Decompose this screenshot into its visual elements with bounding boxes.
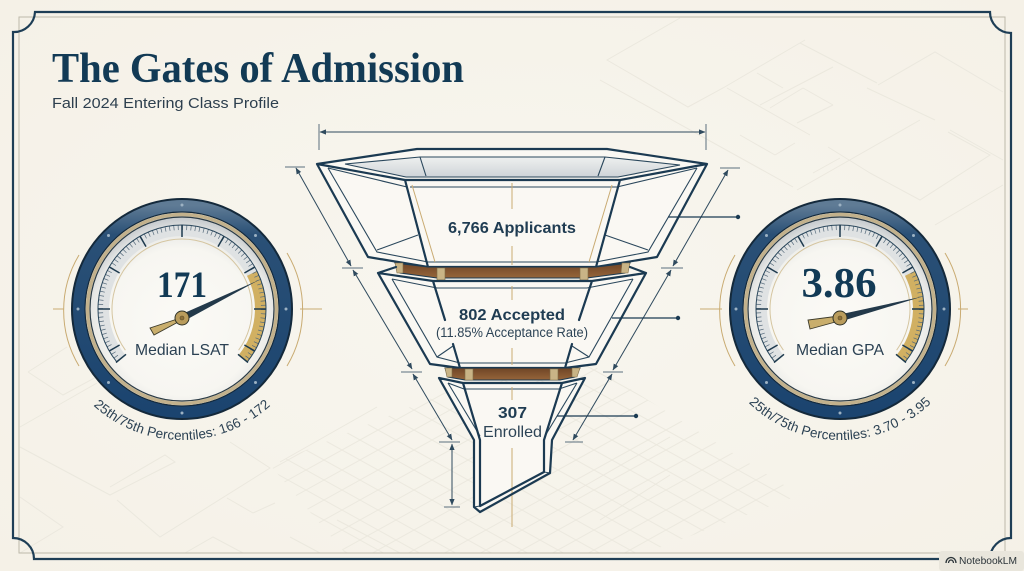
leader lines — [557, 215, 740, 418]
gauge: median GPA — [700, 198, 968, 440]
funnel tier: accepted — [378, 267, 646, 368]
label: enrolled: Enrolled — [483, 424, 542, 441]
percentile label: 25th/75th Percentiles: 166 - 172 — [94, 400, 270, 440]
wooden gate band lower — [445, 368, 580, 380]
funnel tier: enrolled spout — [439, 378, 585, 527]
needle — [808, 297, 922, 329]
value: 3.86: 3.86 — [802, 261, 876, 307]
percentile label: 25th/75th Percentiles: 3.70 - 3.95 — [749, 396, 930, 440]
label: 307: 307 — [498, 405, 527, 422]
needle — [150, 280, 259, 335]
label: accepted: 802 Accepted — [459, 307, 565, 324]
title: The Gates of Admission — [52, 46, 464, 92]
NotebookLM badge — [939, 551, 1024, 571]
gauge: median LSAT — [53, 198, 322, 440]
label: acceptance rate: (11.85% Acceptance Rate) — [436, 325, 588, 340]
funnel dimension lines — [285, 124, 740, 507]
NotebookLM badge: NotebookLM — [959, 555, 1017, 567]
label: median LSAT: Median LSAT — [135, 342, 229, 359]
funnel — [317, 149, 740, 527]
funnel tier: applicants — [317, 149, 707, 267]
value: 171: 171 — [157, 265, 207, 306]
label: applicants: 6,766 Applicants — [448, 220, 576, 237]
subtitle: Fall 2024 Entering Class Profile — [52, 96, 279, 112]
label: median GPA: Median GPA — [796, 342, 884, 359]
wooden gate band upper — [395, 263, 630, 280]
